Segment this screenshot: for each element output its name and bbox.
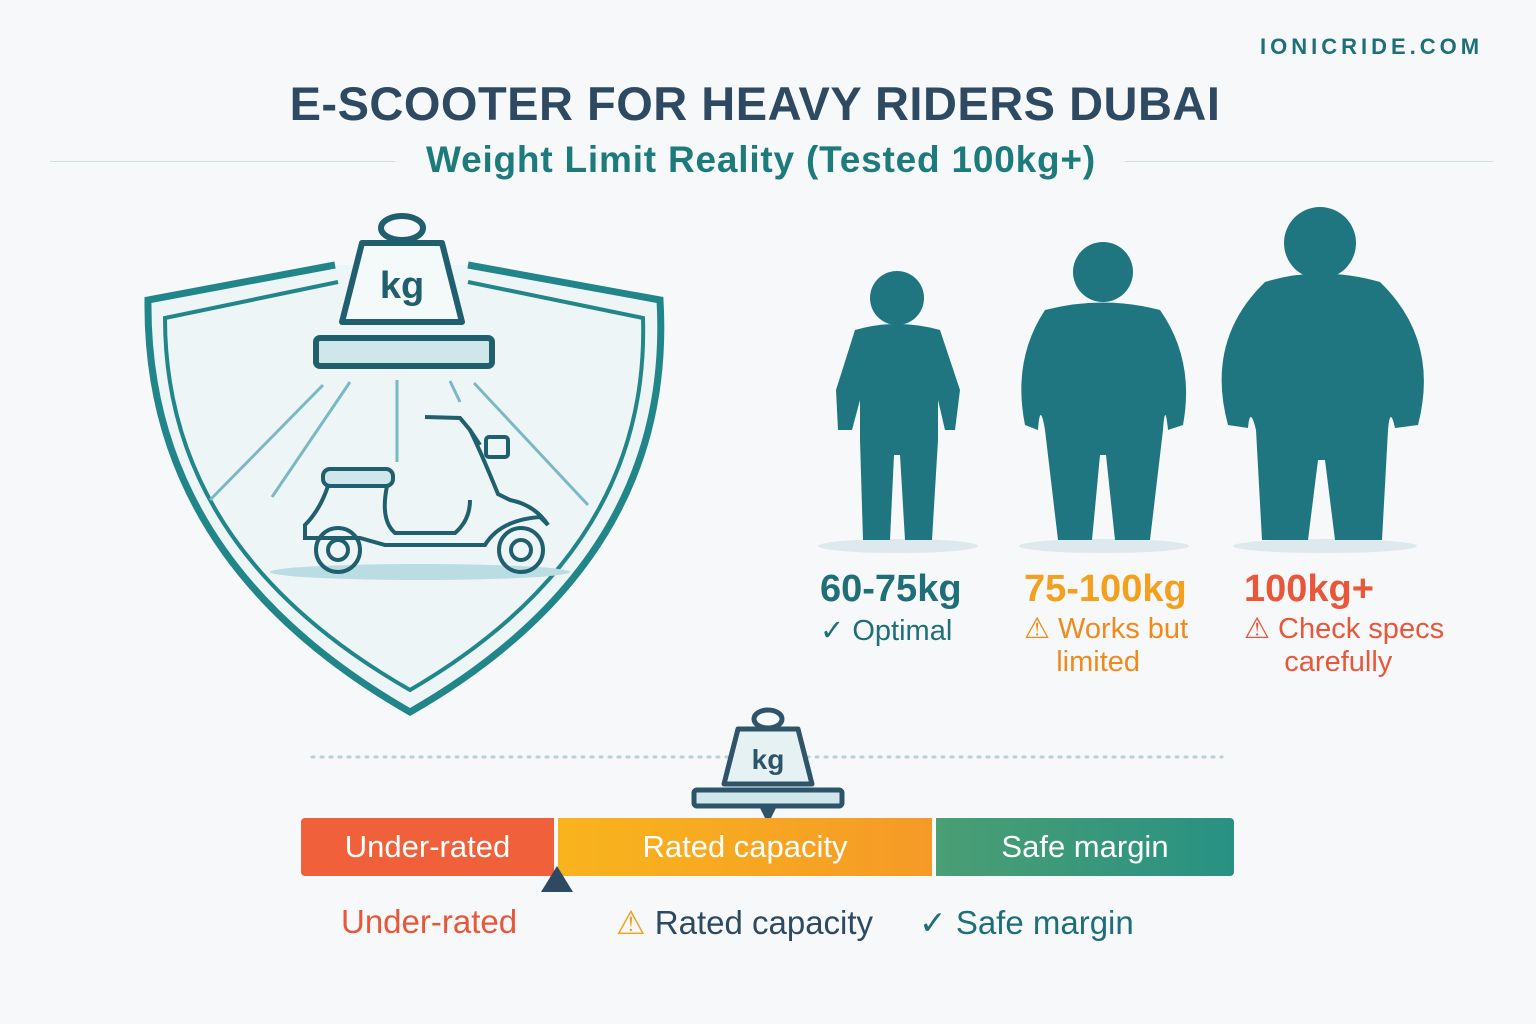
label: 100kg+: 100kg+: [1244, 568, 1374, 610]
segment: safe margin: [936, 818, 1234, 876]
bar: scale segments: [301, 818, 1234, 876]
figure: 100kg+: [1222, 207, 1424, 553]
title: E-SCOOTER FOR HEAVY RIDERS DUBAI: [290, 77, 1220, 130]
label: 60-75kg: [820, 568, 962, 647]
segment: under-rated: Under-rated: [345, 829, 510, 864]
label: 60-75kg: 60-75kg: [820, 568, 962, 610]
segment: safe margin: Safe margin: [1001, 829, 1169, 864]
icon: kg weight: [316, 216, 492, 366]
brand: IONICRIDE.COM: [1260, 34, 1483, 59]
label: 75-100kg: ⚠ Works but: [1024, 613, 1188, 645]
label: 75-100kg: limited: [1056, 646, 1140, 678]
segment: under-rated: [301, 818, 554, 876]
icon: scale marker: kg: [752, 744, 784, 775]
icon: scale marker: [694, 710, 842, 824]
figure: 75-100kg: [1019, 242, 1189, 553]
label: 100kg+: [1244, 568, 1444, 678]
dotted line: [312, 756, 1222, 758]
label: 100kg+: ⚠ Check specs: [1244, 613, 1444, 645]
icon: kg weight: kg: [380, 265, 424, 307]
label: 60-75kg: ✓ Optimal: [820, 615, 952, 647]
legend: [341, 903, 1134, 941]
label: 100kg+: carefully: [1284, 646, 1392, 678]
marker triangle: [541, 866, 573, 892]
legend: ⚠ Rated capacity: [616, 904, 873, 941]
label: 75-100kg: 75-100kg: [1024, 568, 1187, 610]
label: 75-100kg: [1024, 568, 1188, 678]
legend: Under-rated: [341, 903, 517, 940]
figure: 60-75kg: [818, 271, 978, 553]
icon: scooter: [270, 417, 570, 580]
segment: rated capacity: Rated capacity: [642, 829, 848, 864]
legend: ✓ Safe margin: [919, 904, 1134, 941]
segment: rated capacity: [558, 818, 932, 876]
subtitle: Weight Limit Reality (Tested 100kg+): [426, 139, 1096, 180]
